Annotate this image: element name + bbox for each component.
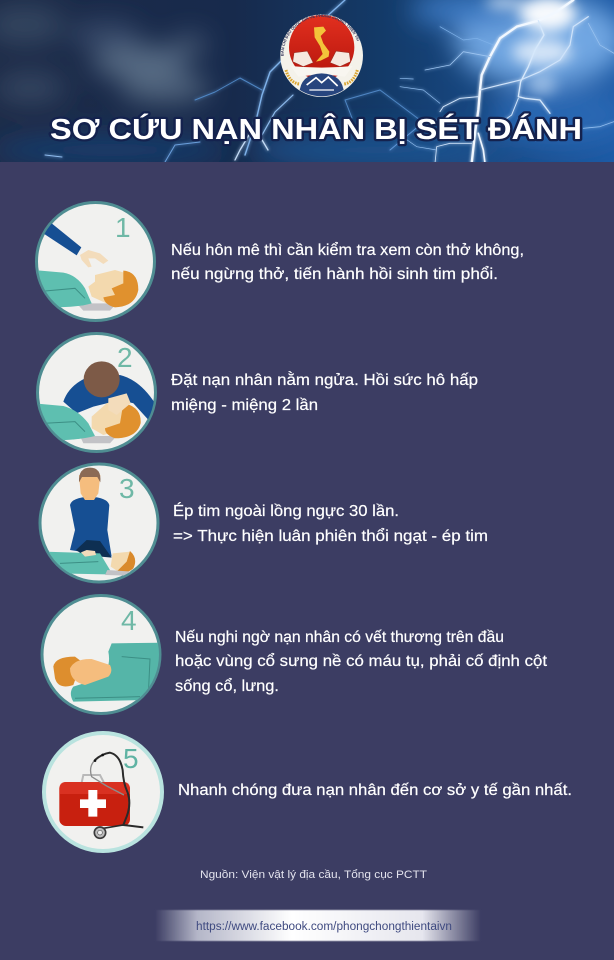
text: step 4: sống cổ, lưng. — [175, 678, 279, 695]
text: step 2: Đặt nạn nhân nằm ngửa. Hồi sức hô hấp — [171, 372, 478, 389]
step 5 — [44, 733, 572, 851]
illustration: step 3 chest compression — [40, 464, 158, 582]
text: step 4: hoặc vùng cổ sưng nề có máu tụ, phải cố định cột — [175, 653, 548, 670]
source note: Nguồn: Viện vật lý địa cầu, Tổng cục PCTT — [200, 869, 427, 881]
text: step 3: Ép tim ngoài lồng ngực 30 lần. — [173, 503, 399, 520]
step 2 — [33, 334, 478, 452]
text: step 2: miệng - miệng 2 lần — [171, 397, 318, 414]
illustration: step 4 stabilise neck — [42, 596, 163, 714]
logo ring text: BAN CHỈ ĐẠO QUỐC GIA VỀ PHÒNG CHỐNG THIÊN TAI — [280, 14, 360, 56]
illustration: step 2 mouth to mouth — [33, 334, 156, 452]
logo wheat — [286, 70, 357, 84]
illustration: step 1 rescuer checking breathing — [33, 202, 154, 320]
title: SƠ CỨU NẠN NHÂN BỊ SÉT ĐÁNH — [50, 112, 582, 146]
step 1 — [33, 202, 524, 320]
logo map of Vietnam — [314, 27, 329, 62]
text: step 1: nếu ngừng thở, tiến hành hồi sinh tim phổi. — [171, 266, 498, 283]
url bar — [155, 910, 481, 941]
text: step 4: Nếu nghi ngờ nạn nhân có vết thương trên đầu — [175, 629, 504, 646]
step 3 — [40, 464, 488, 582]
illustration: step 3 chest compression: 3 — [119, 473, 135, 504]
illustration: step 4 stabilise neck: 4 — [121, 605, 137, 636]
logo hands — [293, 51, 351, 67]
illustration: step 5 first aid kit — [44, 733, 162, 851]
header storm banner — [0, 0, 614, 168]
text: step 5: Nhanh chóng đưa nạn nhân đến cơ sở y tế gần nhất. — [178, 782, 572, 799]
illustration: step 5 first aid kit: 5 — [123, 743, 139, 774]
illustration: step 1 rescuer checking breathing: 1 — [115, 212, 131, 243]
lightning bolts — [45, 0, 614, 163]
url bar: https://www.facebook.com/phongchongthientaivn — [196, 921, 452, 933]
text: step 1: Nếu hôn mê thì cần kiểm tra xem còn thở không, — [171, 242, 524, 259]
logo gear and mountain — [299, 73, 344, 98]
text: step 3: => Thực hiện luân phiên thổi ngạt - ép tim — [173, 528, 488, 545]
step 4 — [42, 596, 548, 714]
illustration: step 2 mouth to mouth: 2 — [117, 342, 133, 373]
logo emblem — [280, 14, 363, 97]
